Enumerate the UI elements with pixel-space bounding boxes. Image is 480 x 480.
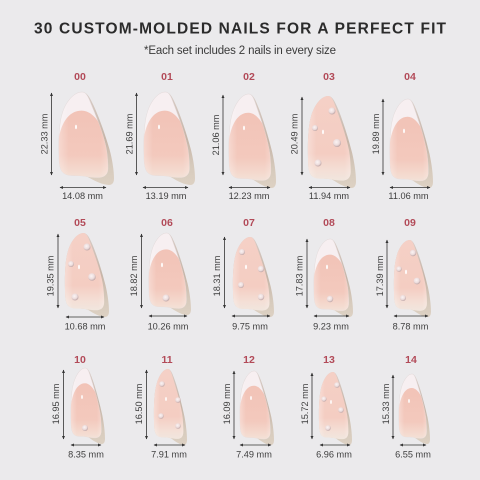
size 08: 9.23 mm	[313, 322, 349, 332]
size 06: 18.82 mm	[129, 255, 139, 296]
size 10: 10	[74, 354, 86, 366]
size 03: 20.49 mm	[290, 113, 300, 154]
size 10	[51, 354, 105, 460]
size 04: 11.06 mm	[388, 191, 429, 201]
size 03: 03	[323, 71, 335, 83]
size 14: 15.33 mm	[381, 383, 391, 424]
size 10: 16.95 mm	[51, 383, 61, 424]
size 08: 08	[323, 217, 335, 229]
size 10: 8.35 mm	[68, 450, 104, 460]
size 08: 17.83 mm	[294, 255, 304, 296]
size 05: 19.35 mm	[46, 255, 56, 296]
size 07: 18.31 mm	[212, 255, 222, 296]
size 02: 21.06 mm	[211, 114, 221, 155]
size 12: 7.49 mm	[236, 450, 272, 460]
size 11: 16.50 mm	[134, 383, 144, 424]
size 09: 09	[404, 217, 416, 229]
size 12: 16.09 mm	[222, 383, 232, 424]
size 11	[134, 354, 187, 460]
size 09: 17.39 mm	[375, 255, 385, 296]
size 14: 6.55 mm	[395, 450, 431, 460]
size 09: 8.78 mm	[393, 322, 429, 332]
size 11: 7.91 mm	[151, 450, 187, 460]
size 05: 10.68 mm	[65, 322, 106, 332]
size 13: 13	[323, 354, 335, 366]
size 01: 21.69 mm	[124, 113, 134, 154]
size 04	[371, 71, 433, 201]
size 09	[375, 217, 431, 332]
size 08	[294, 217, 353, 332]
size 06	[129, 217, 191, 332]
size 01	[124, 71, 195, 201]
size 03: 11.94 mm	[309, 191, 349, 201]
size 01: 01	[161, 71, 173, 83]
size 14: 14	[405, 354, 417, 366]
size 00: 14.08 mm	[62, 191, 103, 201]
size 13	[300, 354, 352, 460]
size 02: 02	[243, 71, 255, 83]
subtitle: *Each set includes 2 nails in every size	[144, 45, 336, 57]
title: 30 CUSTOM-MOLDED NAILS FOR A PERFECT FIT	[34, 20, 447, 38]
size 07: 9.75 mm	[232, 322, 268, 332]
size 06: 10.26 mm	[148, 322, 189, 332]
size 12: 12	[243, 354, 255, 366]
size 00	[40, 71, 114, 201]
size 05: 05	[74, 217, 86, 229]
size 00: 22.33 mm	[40, 113, 50, 154]
size 01: 13.19 mm	[146, 191, 187, 201]
size 00: 00	[74, 71, 86, 83]
size 13: 6.96 mm	[316, 450, 352, 460]
size 03	[290, 71, 356, 201]
size 02: 12.23 mm	[229, 191, 270, 201]
size 07: 07	[243, 217, 255, 229]
size 04: 04	[404, 71, 416, 83]
size 05	[46, 217, 109, 332]
size 12	[222, 354, 274, 460]
size 02	[211, 71, 276, 201]
size 14	[381, 354, 431, 460]
size 04: 19.89 mm	[371, 113, 381, 154]
size 07	[212, 217, 274, 332]
size 13: 15.72 mm	[300, 383, 310, 424]
size 11: 11	[161, 354, 173, 366]
size 06: 06	[161, 217, 173, 229]
